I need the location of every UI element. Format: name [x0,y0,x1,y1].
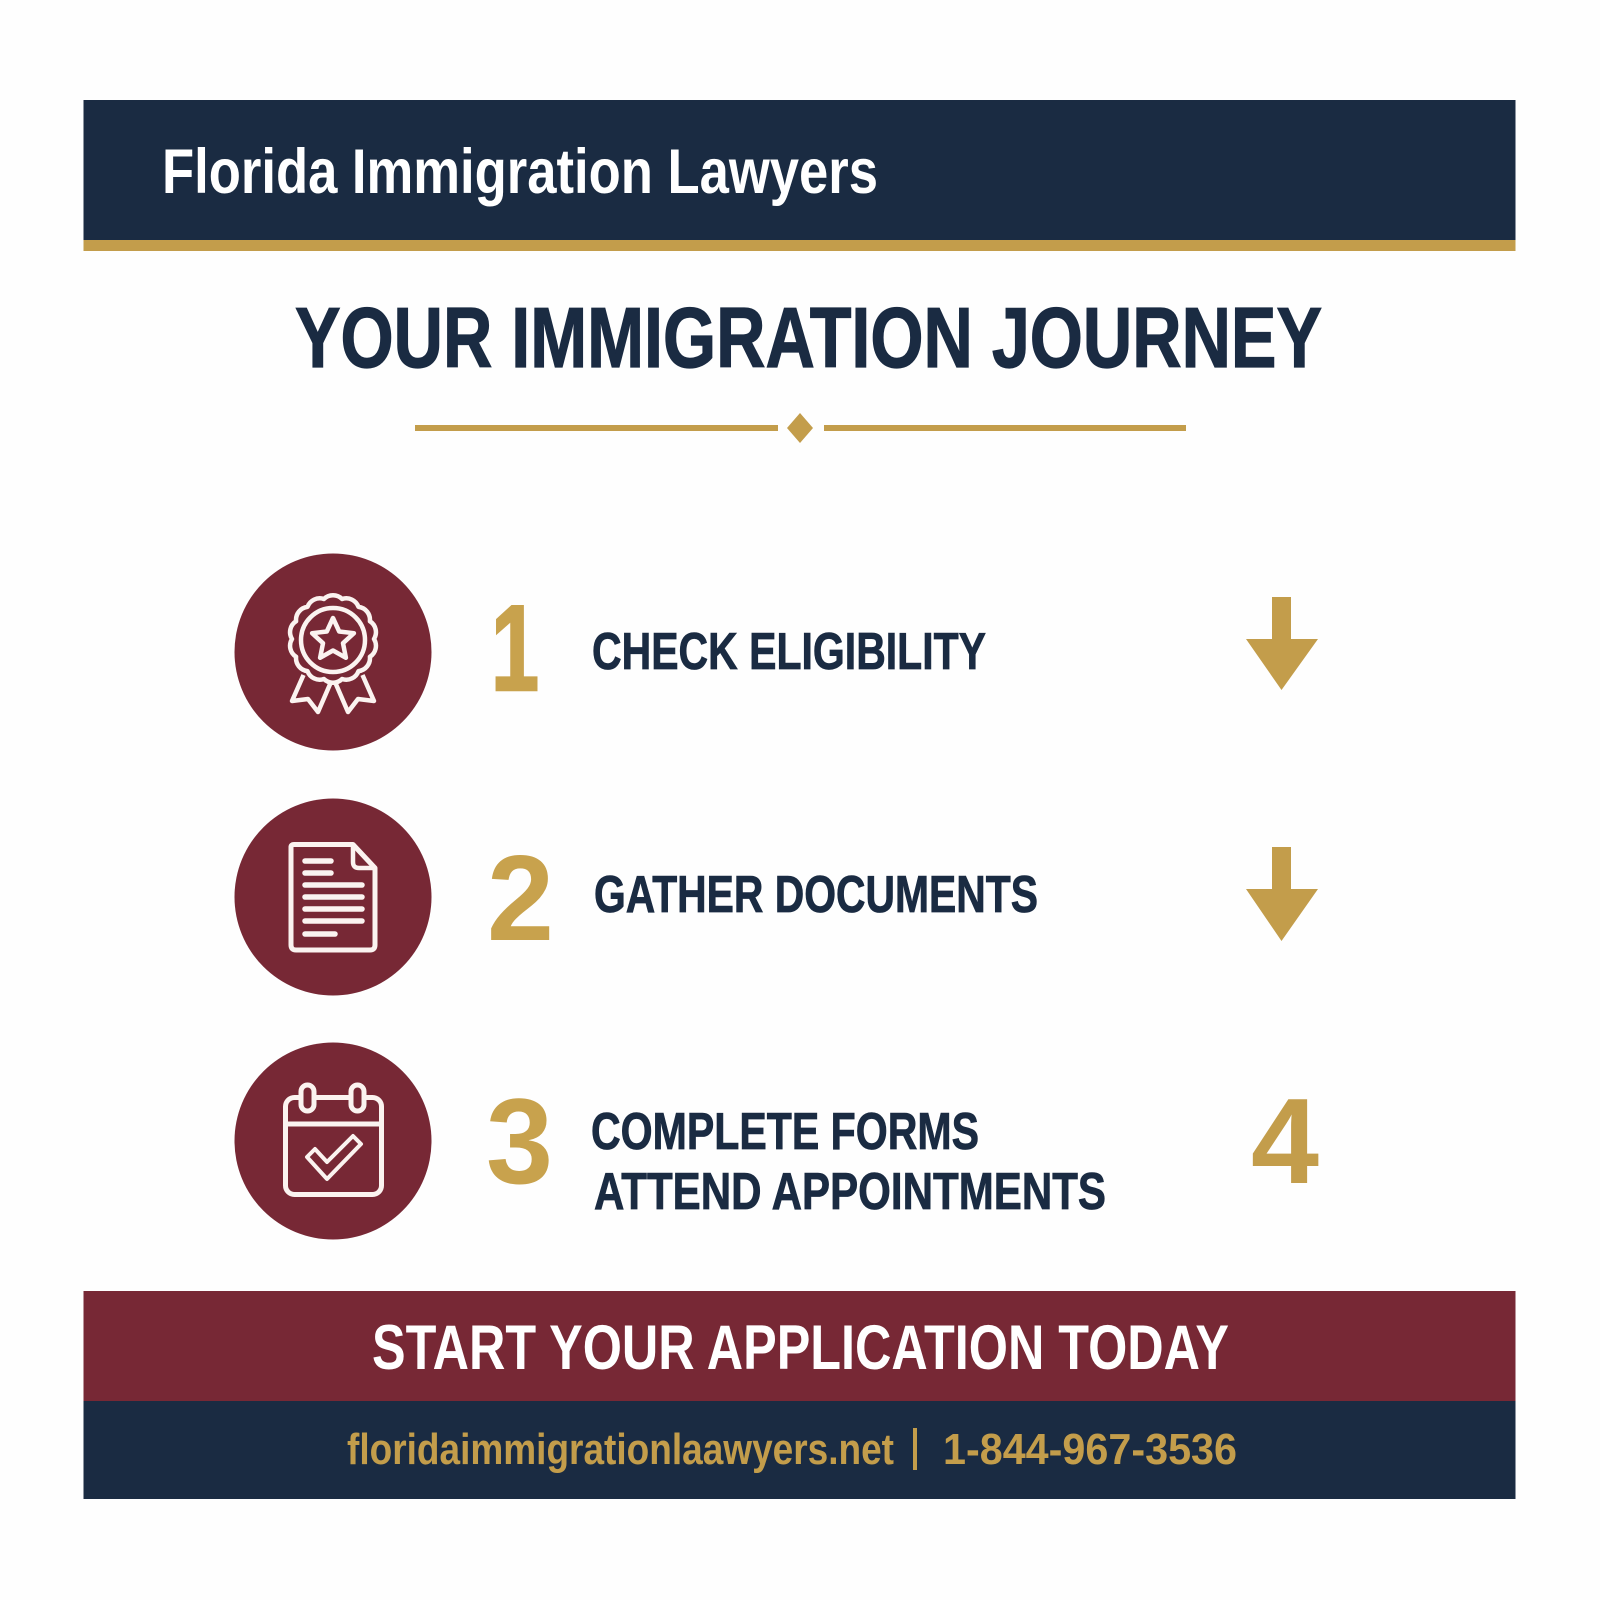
arrow down 2 [1246,847,1318,941]
contact footer band [84,1401,1516,1499]
step 1 number: 1 [491,580,539,716]
step 3 label: COMPLETE FORMS [591,1103,979,1161]
title: YOUR IMMIGRATION JOURNEY [295,291,1322,386]
header band [84,100,1516,251]
arrow down 1 [1246,597,1318,690]
contact footer band: 1-844-967-3536 [943,1425,1237,1474]
step 3 number: 3 [486,1073,553,1209]
step 3 label: ATTEND APPOINTMENTS [594,1163,1106,1221]
step 2 icon: document [234,798,432,996]
call to action band: START YOUR APPLICATION TODAY [372,1313,1229,1383]
step 2 number: 2 [487,830,554,966]
step 1 label: CHECK ELIGIBILITY [592,623,986,681]
call to action band [84,1291,1516,1401]
step 3 label [591,1103,1106,1221]
step 4 number: 4 [1251,1073,1319,1209]
step 1 icon: award badge [234,554,432,750]
title divider with diamond [415,413,1186,443]
contact footer band: floridaimmigrationlaawyers.net [347,1425,894,1474]
step 2 label: GATHER DOCUMENTS [594,866,1038,924]
header brand name: Florida Immigration Lawyers [162,137,878,207]
step 3 icon: calendar with check [234,1042,432,1240]
